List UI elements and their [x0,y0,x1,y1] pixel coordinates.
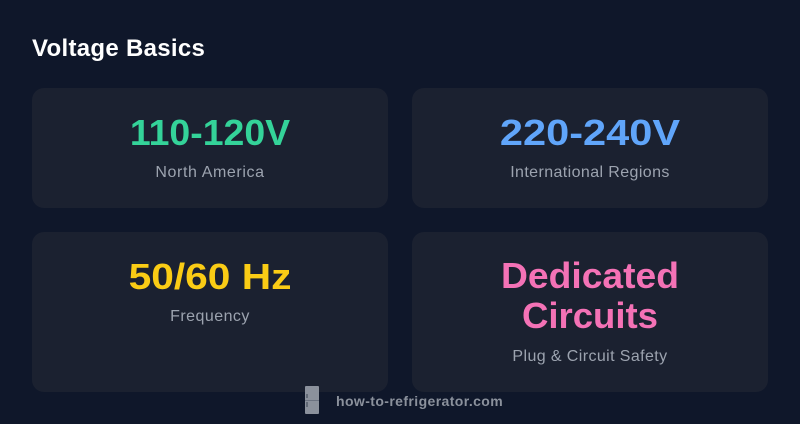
value: 220-240V: 220-240V [500,112,680,153]
label: North America: North America [155,164,265,181]
panel: dedicated circuits [412,232,768,392]
icon: refrigerator [305,386,319,414]
value: Dedicated Circuits [501,255,679,336]
label: International Regions: International Regions [510,164,670,181]
value: Dedicated Circuits: Circuits [522,295,658,336]
label: Frequency: Frequency [170,308,250,325]
value: Dedicated Circuits: Dedicated [501,255,679,296]
panel: 220-240V [412,88,768,208]
panel: 110-120V [32,88,388,208]
title: Voltage Basics [32,35,205,62]
panel: frequency [32,232,388,392]
label: Plug & Circuit Safety: Plug & Circuit Safety [512,348,668,365]
footer: website: how-to-refrigerator.com [336,393,503,409]
value: 110-120V: 110-120V [130,112,290,153]
value: 50/60 Hz: 50/60 Hz [129,256,291,297]
